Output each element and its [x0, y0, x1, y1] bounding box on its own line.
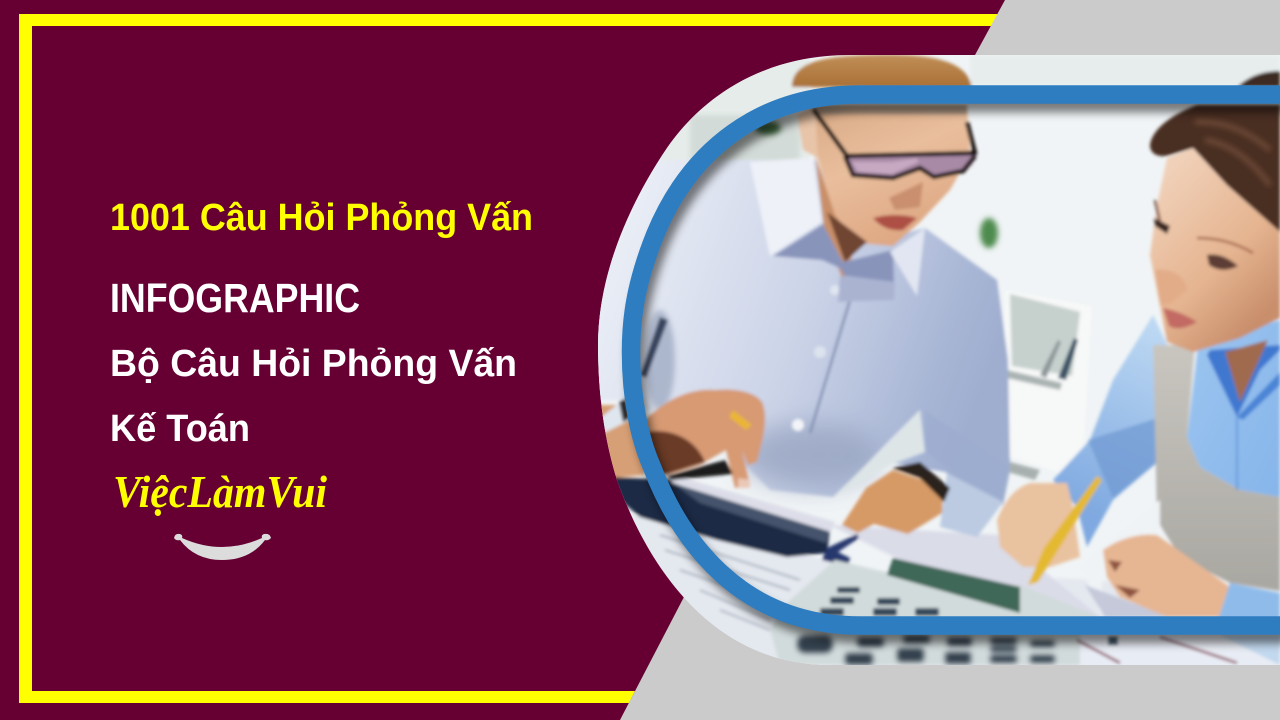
band drop shadow on photo: [636, 104, 1280, 634]
second hand with watch and cuff: [842, 462, 1003, 537]
calculator screen: [887, 558, 1020, 613]
heading: Kế Toán: Kế Toán: [110, 408, 250, 450]
calculator body: [770, 560, 1100, 665]
right woman: gray vest: [1153, 345, 1280, 591]
resting hand and cuff: [1103, 535, 1280, 620]
shirt shading: [740, 423, 880, 487]
left woman: collar: [750, 158, 925, 302]
left woman: shirt body and sleeve: [590, 160, 1010, 505]
gap between body and sleeve: [850, 410, 926, 485]
lower row keys, blurred: [797, 635, 1055, 665]
heading: Bộ Câu Hỏi Phỏng Vấn: Bộ Câu Hỏi Phỏng Vấn: [110, 343, 517, 385]
logo: ViệcLàmVui: ViệcLàmVui: [113, 466, 327, 517]
forearm and wristband outside ring: [601, 397, 646, 480]
lower-right paper and lines: [1076, 635, 1280, 665]
left woman: glasses: [813, 109, 977, 178]
photo: two accountants at a desk: [590, 50, 1280, 670]
title: 1001 Câu Hỏi Phỏng Vấn: 1001 Câu Hỏi Phỏng Vấn: [110, 197, 533, 239]
right woman: shirt front: [1187, 320, 1280, 497]
right woman: face: [1150, 148, 1280, 352]
left woman: hair: [792, 55, 972, 88]
desk papers: [630, 500, 1166, 658]
blue rounded band: [631, 94, 1280, 626]
shelf in background: [1005, 290, 1092, 480]
right woman: shoulder and sleeve: [1053, 315, 1170, 547]
keyboard: [612, 474, 859, 566]
right woman: hair: [1150, 71, 1280, 232]
calculator keys: [820, 587, 939, 616]
left woman: neck and face: [797, 105, 970, 280]
left hand with pen: [645, 390, 765, 488]
blurred upper-left wall and plants: [658, 58, 1280, 252]
logo smile: [174, 534, 271, 560]
gray diagonal backdrop: [620, 0, 1280, 720]
yellow frame: [19, 14, 998, 703]
heading: INFOGRAPHIC: INFOGRAPHIC: [110, 275, 360, 321]
photo background: office wall: [590, 50, 1280, 670]
pencil hand: [997, 476, 1102, 585]
